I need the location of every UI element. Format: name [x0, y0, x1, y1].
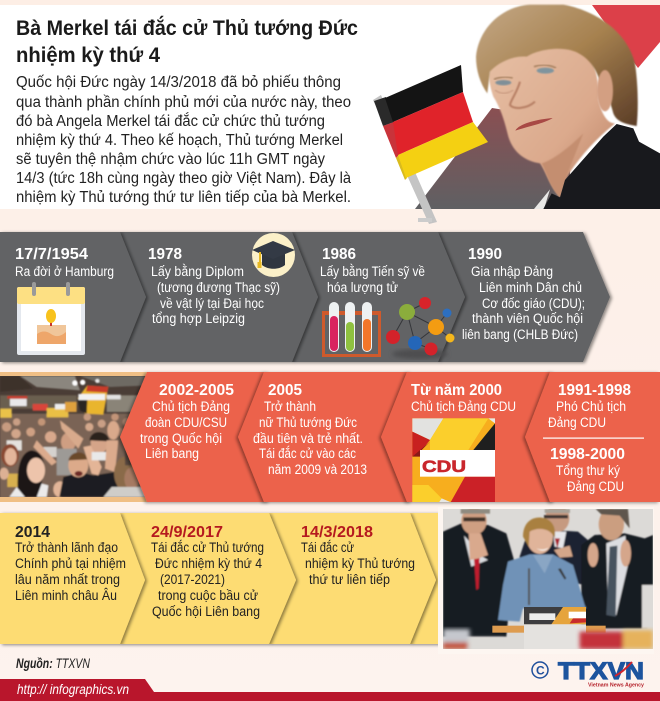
item: 14/3/2018: 14/3/2018	[301, 524, 373, 541]
intro text block: nhiệm kỳ Thủ tướng thứ tư liên tiếp của bà Merkel.	[16, 189, 351, 206]
eye socket lines	[495, 90, 513, 93]
item: 17/7/1954: 17/7/1954	[15, 246, 88, 263]
intro text block	[16, 74, 351, 206]
item: 14/3/2018: nhiệm kỳ Thủ tướng	[305, 556, 415, 571]
item: 1978: (tương đương Thạc sỹ)	[157, 280, 280, 295]
item: 2002-2005: đoàn CDU/CSU	[145, 415, 227, 430]
item: 1998-2000: Tổng thư ký	[556, 463, 620, 478]
intro text block: 14/3 (tức 18h cùng ngày theo giờ Việt Nam). Đây là	[16, 170, 351, 187]
title	[16, 16, 358, 67]
item: 1978: 1978	[148, 246, 182, 263]
item: 24/9/2017	[151, 524, 264, 619]
signs	[10, 399, 27, 406]
ear	[597, 70, 613, 111]
icon: test tubes	[322, 302, 381, 357]
source: Nguồn: TTXVN	[16, 655, 91, 671]
item: 2005: Trở thành	[264, 399, 316, 414]
intro text block: sẽ tuyên thệ nhậm chức vào lúc 11h GMT ngày	[16, 151, 325, 168]
item: 2014: Liên minh châu Âu	[15, 588, 117, 603]
intro text block: qua thành phần chính phủ mới của nước này, theo	[16, 94, 351, 111]
right man	[90, 439, 108, 453]
title: nhiệm kỳ thứ 4	[16, 44, 160, 67]
item: 2005: năm 2009 và 2013	[268, 462, 367, 477]
dark background triangle	[415, 108, 570, 209]
middle arm	[33, 440, 57, 465]
item: 14/3/2018: Tái đắc cử	[301, 540, 354, 555]
item: 24/9/2017: Quốc hội Liên bang	[152, 604, 260, 619]
item: 2005: Tái đắc cử vào các	[259, 446, 356, 461]
item: 2002-2005	[140, 382, 234, 461]
item: 1990: liên bang (CHLB Đức)	[462, 327, 578, 342]
item: 14/3/2018	[301, 524, 415, 587]
item: 2005: 2005	[268, 382, 302, 399]
item: 24/9/2017: trong cuộc bầu cử	[158, 588, 258, 603]
item: 1991-1998: 1991-1998	[558, 382, 631, 399]
intro text block: Quốc hội Đức ngày 14/3/2018 đã bỏ phiếu thông	[16, 74, 341, 91]
mouth	[515, 118, 553, 131]
item: 1978: Lấy bằng Diplom	[151, 264, 244, 279]
item: 1986: 1986	[322, 246, 356, 263]
item: 2014: 2014	[15, 524, 50, 541]
logo: TTXVN: C	[536, 664, 545, 678]
left man	[443, 523, 514, 637]
pole	[373, 95, 437, 224]
shirt	[534, 189, 550, 209]
item: 2005: nữ Thủ tướng Đức	[259, 415, 357, 430]
item: 2014	[15, 524, 126, 603]
item: 17/7/1954	[15, 246, 114, 279]
mid man	[520, 530, 590, 585]
footer bar	[0, 679, 660, 701]
item: 24/9/2017: (2017-2021)	[160, 572, 225, 587]
eyes	[495, 80, 511, 85]
photo: Merkel at podium	[438, 504, 654, 654]
logo: TTXVN: Vietnam News Agency	[588, 682, 645, 688]
item: 1986	[320, 246, 425, 295]
item: Từ năm 2000: Chủ tịch Đảng CDU	[411, 399, 516, 414]
intro text block: đó bà Angela Merkel tái đắc cử chức thủ tướng	[16, 113, 325, 130]
website link: http:// infographics.vn	[17, 682, 129, 697]
item: 2002-2005: Liên bang	[145, 446, 199, 461]
logo: TTXVN: TTXVN	[558, 658, 644, 685]
icon: graduation cap	[252, 233, 295, 277]
logo: CDU	[412, 418, 495, 503]
brows	[494, 77, 513, 79]
icon: German flag	[373, 65, 488, 224]
item: 1978	[148, 246, 280, 326]
right man	[581, 533, 653, 628]
item: 1990: 1990	[468, 246, 502, 263]
item: 2005: đầu tiên và trẻ nhất.	[253, 431, 363, 446]
item: 24/9/2017: 24/9/2017	[151, 524, 223, 541]
panel: orange timeline	[120, 372, 660, 503]
item: 1990: Liên minh Dân chủ	[479, 280, 582, 295]
item: 17/7/1954: Ra đời ở Hamburg	[15, 264, 114, 279]
item: 2005	[253, 382, 367, 477]
intro text block: nhiệm kỳ thứ 4. Theo kế hoạch, Thủ tướng Merkel	[16, 132, 343, 149]
left woman	[1, 444, 19, 467]
panel: gray timeline	[0, 232, 610, 362]
item: 1991-1998	[543, 382, 644, 439]
item: Từ năm 2000	[411, 382, 516, 414]
item: 1986: hóa lượng tử	[327, 280, 398, 295]
item: 1978: về vật lý tại Đại học	[160, 296, 264, 311]
item: 1998-2000	[550, 446, 625, 494]
item: 2002-2005: trong Quốc hội	[140, 431, 222, 446]
item: 24/9/2017: Đức nhiệm kỳ thứ 4	[155, 556, 262, 571]
item: 14/3/2018: thứ tư liên tiếp	[309, 572, 390, 587]
item: 2002-2005: Chủ tịch Đảng	[152, 399, 230, 414]
photo: cheering crowd	[0, 372, 150, 502]
item: 1991-1998: Đảng CDU	[548, 415, 606, 430]
item: 2014: Chính phủ tại nhiệm	[15, 556, 126, 571]
item: 1990: Gia nhập Đảng	[471, 264, 553, 279]
icon: molecule	[386, 297, 454, 359]
item: 1990: Cơ đốc giáo (CDU);	[482, 296, 585, 311]
icon: birthday calendar	[17, 282, 85, 355]
panel: header	[0, 5, 660, 209]
neck shadow	[542, 133, 583, 197]
item: 1991-1998: Phó Chủ tịch	[556, 399, 626, 414]
red background triangle	[592, 5, 660, 68]
item: 1978: tổng hợp Leipzig	[152, 311, 245, 326]
woman right	[112, 457, 132, 486]
item: 2014: Trở thành lãnh đạo	[15, 540, 118, 555]
item: 2002-2005: 2002-2005	[159, 382, 234, 399]
item: 1998-2000: 1998-2000	[550, 446, 625, 463]
Merkel	[498, 554, 586, 622]
girl	[18, 450, 44, 497]
item: 1998-2000: Đảng CDU	[567, 479, 624, 494]
hair	[476, 5, 638, 126]
item: 2014: lâu năm nhất trong	[15, 572, 120, 587]
item: 1990	[462, 246, 585, 342]
logo: CDU: CDU	[422, 458, 466, 476]
item: 1990: thành viên Quốc hội	[472, 311, 583, 326]
panel: yellow timeline	[0, 513, 445, 644]
neck and face	[489, 46, 615, 197]
item: Từ năm 2000: Từ năm 2000	[411, 382, 502, 399]
background faces	[2, 422, 11, 432]
portrait of Angela Merkel	[476, 5, 660, 209]
flag sign	[77, 385, 108, 415]
logo: TTXVN	[532, 658, 645, 688]
center man	[59, 472, 117, 497]
jacket	[543, 124, 660, 209]
title: Bà Merkel tái đắc cử Thủ tướng Đức	[16, 16, 358, 40]
nose	[510, 82, 535, 108]
item: 1986: Lấy bằng Tiến sỹ về	[320, 264, 425, 279]
item: 24/9/2017: Tái đắc cử Thủ tướng	[151, 540, 264, 555]
